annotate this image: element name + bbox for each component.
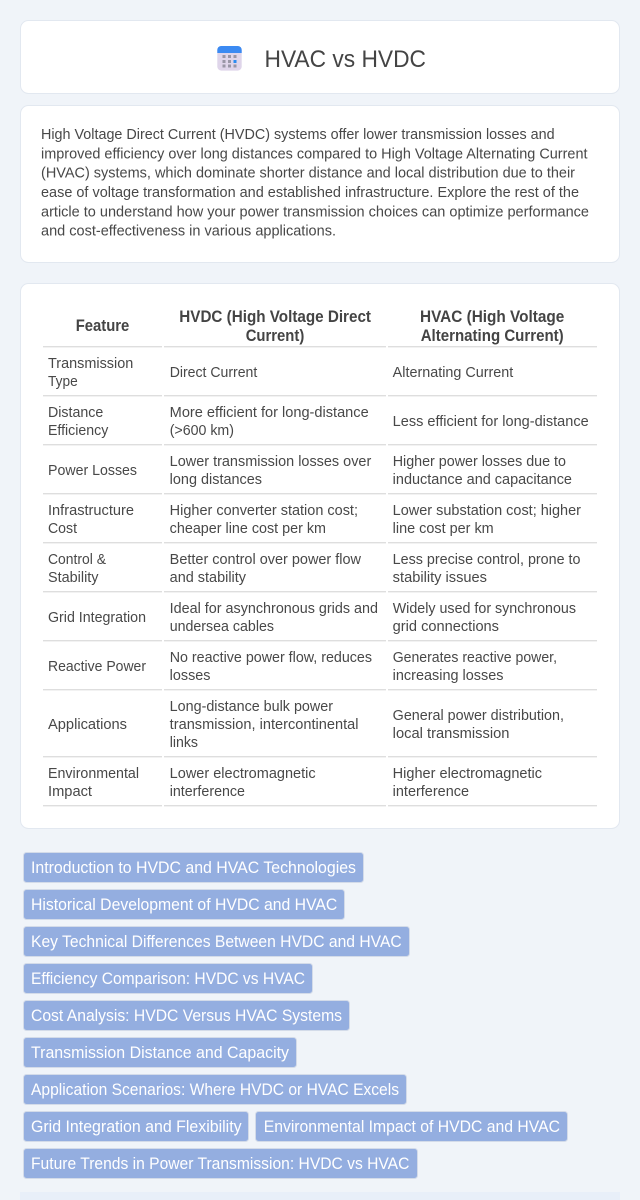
table header row: HVDC (High Voltage Direct: [179, 308, 372, 326]
tag: transmission distance: [24, 1038, 296, 1068]
row: environmental impact: Environmental: [48, 766, 139, 782]
row: power losses: Power Losses: [48, 463, 137, 479]
title: HVAC vs HVDC: [264, 46, 426, 73]
row: reactive power: No reactive power flow, reduces: [170, 650, 372, 666]
row: grid integration: [43, 601, 597, 641]
row: applications: local transmission: [393, 726, 510, 742]
row: infrastructure cost: Infrastructure: [48, 503, 134, 519]
row: environmental impact: Impact: [48, 784, 92, 800]
row: transmission type: [43, 356, 597, 396]
tag: introduction: [24, 852, 364, 882]
tag: historical development: [24, 890, 344, 920]
row: applications: Long-distance bulk power: [170, 699, 333, 715]
table header row: Current): [246, 327, 304, 345]
tag: grid integration: [24, 1112, 248, 1142]
panel: header: [20, 20, 620, 94]
intro text: and cost-effectiveness in various applications.: [41, 224, 336, 240]
row: transmission type: Type: [48, 374, 78, 390]
row: transmission type: Transmission: [48, 356, 133, 372]
tag: key technical differences: Key Technical Differences Between HVDC and HVAC: [31, 933, 402, 951]
row: applications: General power distribution,: [393, 708, 564, 724]
tag: future trends: [24, 1148, 418, 1178]
row: power losses: Lower transmission losses over: [170, 454, 372, 470]
table header row: Feature: [76, 317, 129, 335]
row: distance efficiency: [43, 405, 597, 445]
tag: future trends: Future Trends in Power Transmission: HVDC vs HVAC: [31, 1155, 410, 1173]
row: control and stability: Stability: [48, 570, 99, 586]
tag: application scenarios: [24, 1074, 406, 1104]
tag: environmental impact: [256, 1112, 568, 1142]
row: infrastructure cost: cheaper line cost per km: [170, 521, 326, 537]
row: infrastructure cost: Lower substation cost; higher: [393, 503, 581, 519]
row: environmental impact: Higher electromagnetic: [393, 766, 542, 782]
row: power losses: inductance and capacitance: [393, 472, 572, 488]
row: power losses: [43, 454, 597, 494]
intro text: [41, 127, 589, 240]
row: distance efficiency: Efficiency: [48, 423, 109, 439]
row: applications: links: [170, 735, 198, 751]
tag: efficiency comparison: [24, 964, 312, 994]
row: reactive power: increasing losses: [393, 668, 504, 684]
row: control and stability: Control &: [48, 552, 106, 568]
tag: application scenarios: Application Scenarios: Where HVDC or HVAC Excels: [31, 1081, 399, 1099]
row: control and stability: and stability: [170, 570, 247, 586]
tag: grid integration: Grid Integration and Flexibility: [31, 1118, 242, 1136]
row: control and stability: stability issues: [393, 570, 487, 586]
tag: transmission distance: Transmission Distance and Capacity: [31, 1044, 290, 1062]
row: control and stability: Better control over power flow: [170, 552, 362, 568]
row: infrastructure cost: Higher converter station cost;: [170, 503, 358, 519]
row: reactive power: losses: [170, 668, 210, 684]
tag: key technical differences: [24, 926, 410, 956]
row: grid integration: Widely used for synchronous: [393, 601, 576, 617]
row: environmental impact: interference: [393, 784, 469, 800]
row: reactive power: Generates reactive power,: [393, 650, 557, 666]
tag: environmental impact: Environmental Impact of HVDC and HVAC: [264, 1118, 560, 1136]
tag: cost analysis: Cost Analysis: HVDC Versus HVAC Systems: [31, 1007, 342, 1025]
intro text: (HVAC) systems, which dominate shorter distance and local distribution due to their: [41, 166, 575, 182]
tag: cost analysis: [24, 1000, 350, 1030]
tag: introduction: Introduction to HVDC and HVAC Technologies: [31, 859, 356, 877]
intro text: improved efficiency over long distances compared to High Voltage Alternating Current: [41, 146, 588, 162]
row: infrastructure cost: Cost: [48, 521, 77, 537]
intro text: High Voltage Direct Current (HVDC) systems offer lower transmission losses and: [41, 127, 555, 143]
row: infrastructure cost: [43, 503, 597, 543]
table header row: HVAC (High Voltage: [420, 308, 564, 326]
row: transmission type: Alternating Current: [393, 365, 513, 381]
tag: historical development: Historical Development of HVDC and HVAC: [31, 896, 338, 914]
row: grid integration: grid connections: [393, 619, 499, 635]
row: distance efficiency: (>600 km): [170, 423, 234, 439]
row: grid integration: Grid Integration: [48, 610, 146, 626]
row: power losses: Higher power losses due to: [393, 454, 566, 470]
table header row: [43, 308, 597, 347]
row: distance efficiency: Distance: [48, 405, 103, 421]
row: reactive power: Reactive Power: [48, 659, 146, 675]
panel: footer strip: [20, 1192, 620, 1200]
row: applications: transmission, intercontinental: [170, 717, 358, 733]
intro text: ease of voltage transformation and established infrastructure. Explore the rest of the: [41, 185, 579, 201]
row: reactive power: [43, 650, 597, 690]
row: environmental impact: [43, 766, 597, 806]
panel: topic tags: [24, 852, 568, 1178]
row: distance efficiency: More efficient for long-distance: [170, 405, 369, 421]
row: grid integration: Ideal for asynchronous grids and: [170, 601, 378, 617]
row: power losses: long distances: [170, 472, 262, 488]
icon: calendar: [217, 46, 242, 71]
row: applications: Applications: [48, 717, 127, 733]
tag: efficiency comparison: Efficiency Comparison: HVDC vs HVAC: [31, 970, 305, 988]
row: control and stability: [43, 552, 597, 592]
row: distance efficiency: Less efficient for long-distance: [393, 414, 589, 430]
intro text: article to understand how your power transmission choices can optimize performance: [41, 204, 589, 220]
row: applications: [43, 699, 597, 757]
row: infrastructure cost: line cost per km: [393, 521, 494, 537]
row: transmission type: Direct Current: [170, 365, 257, 381]
row: grid integration: undersea cables: [170, 619, 274, 635]
row: control and stability: Less precise control, prone to: [393, 552, 581, 568]
panel: comparison table: [20, 284, 620, 828]
row: environmental impact: interference: [170, 784, 245, 800]
panel: introduction: [20, 106, 620, 262]
table header row: Alternating Current): [421, 327, 564, 345]
row: environmental impact: Lower electromagnetic: [170, 766, 316, 782]
